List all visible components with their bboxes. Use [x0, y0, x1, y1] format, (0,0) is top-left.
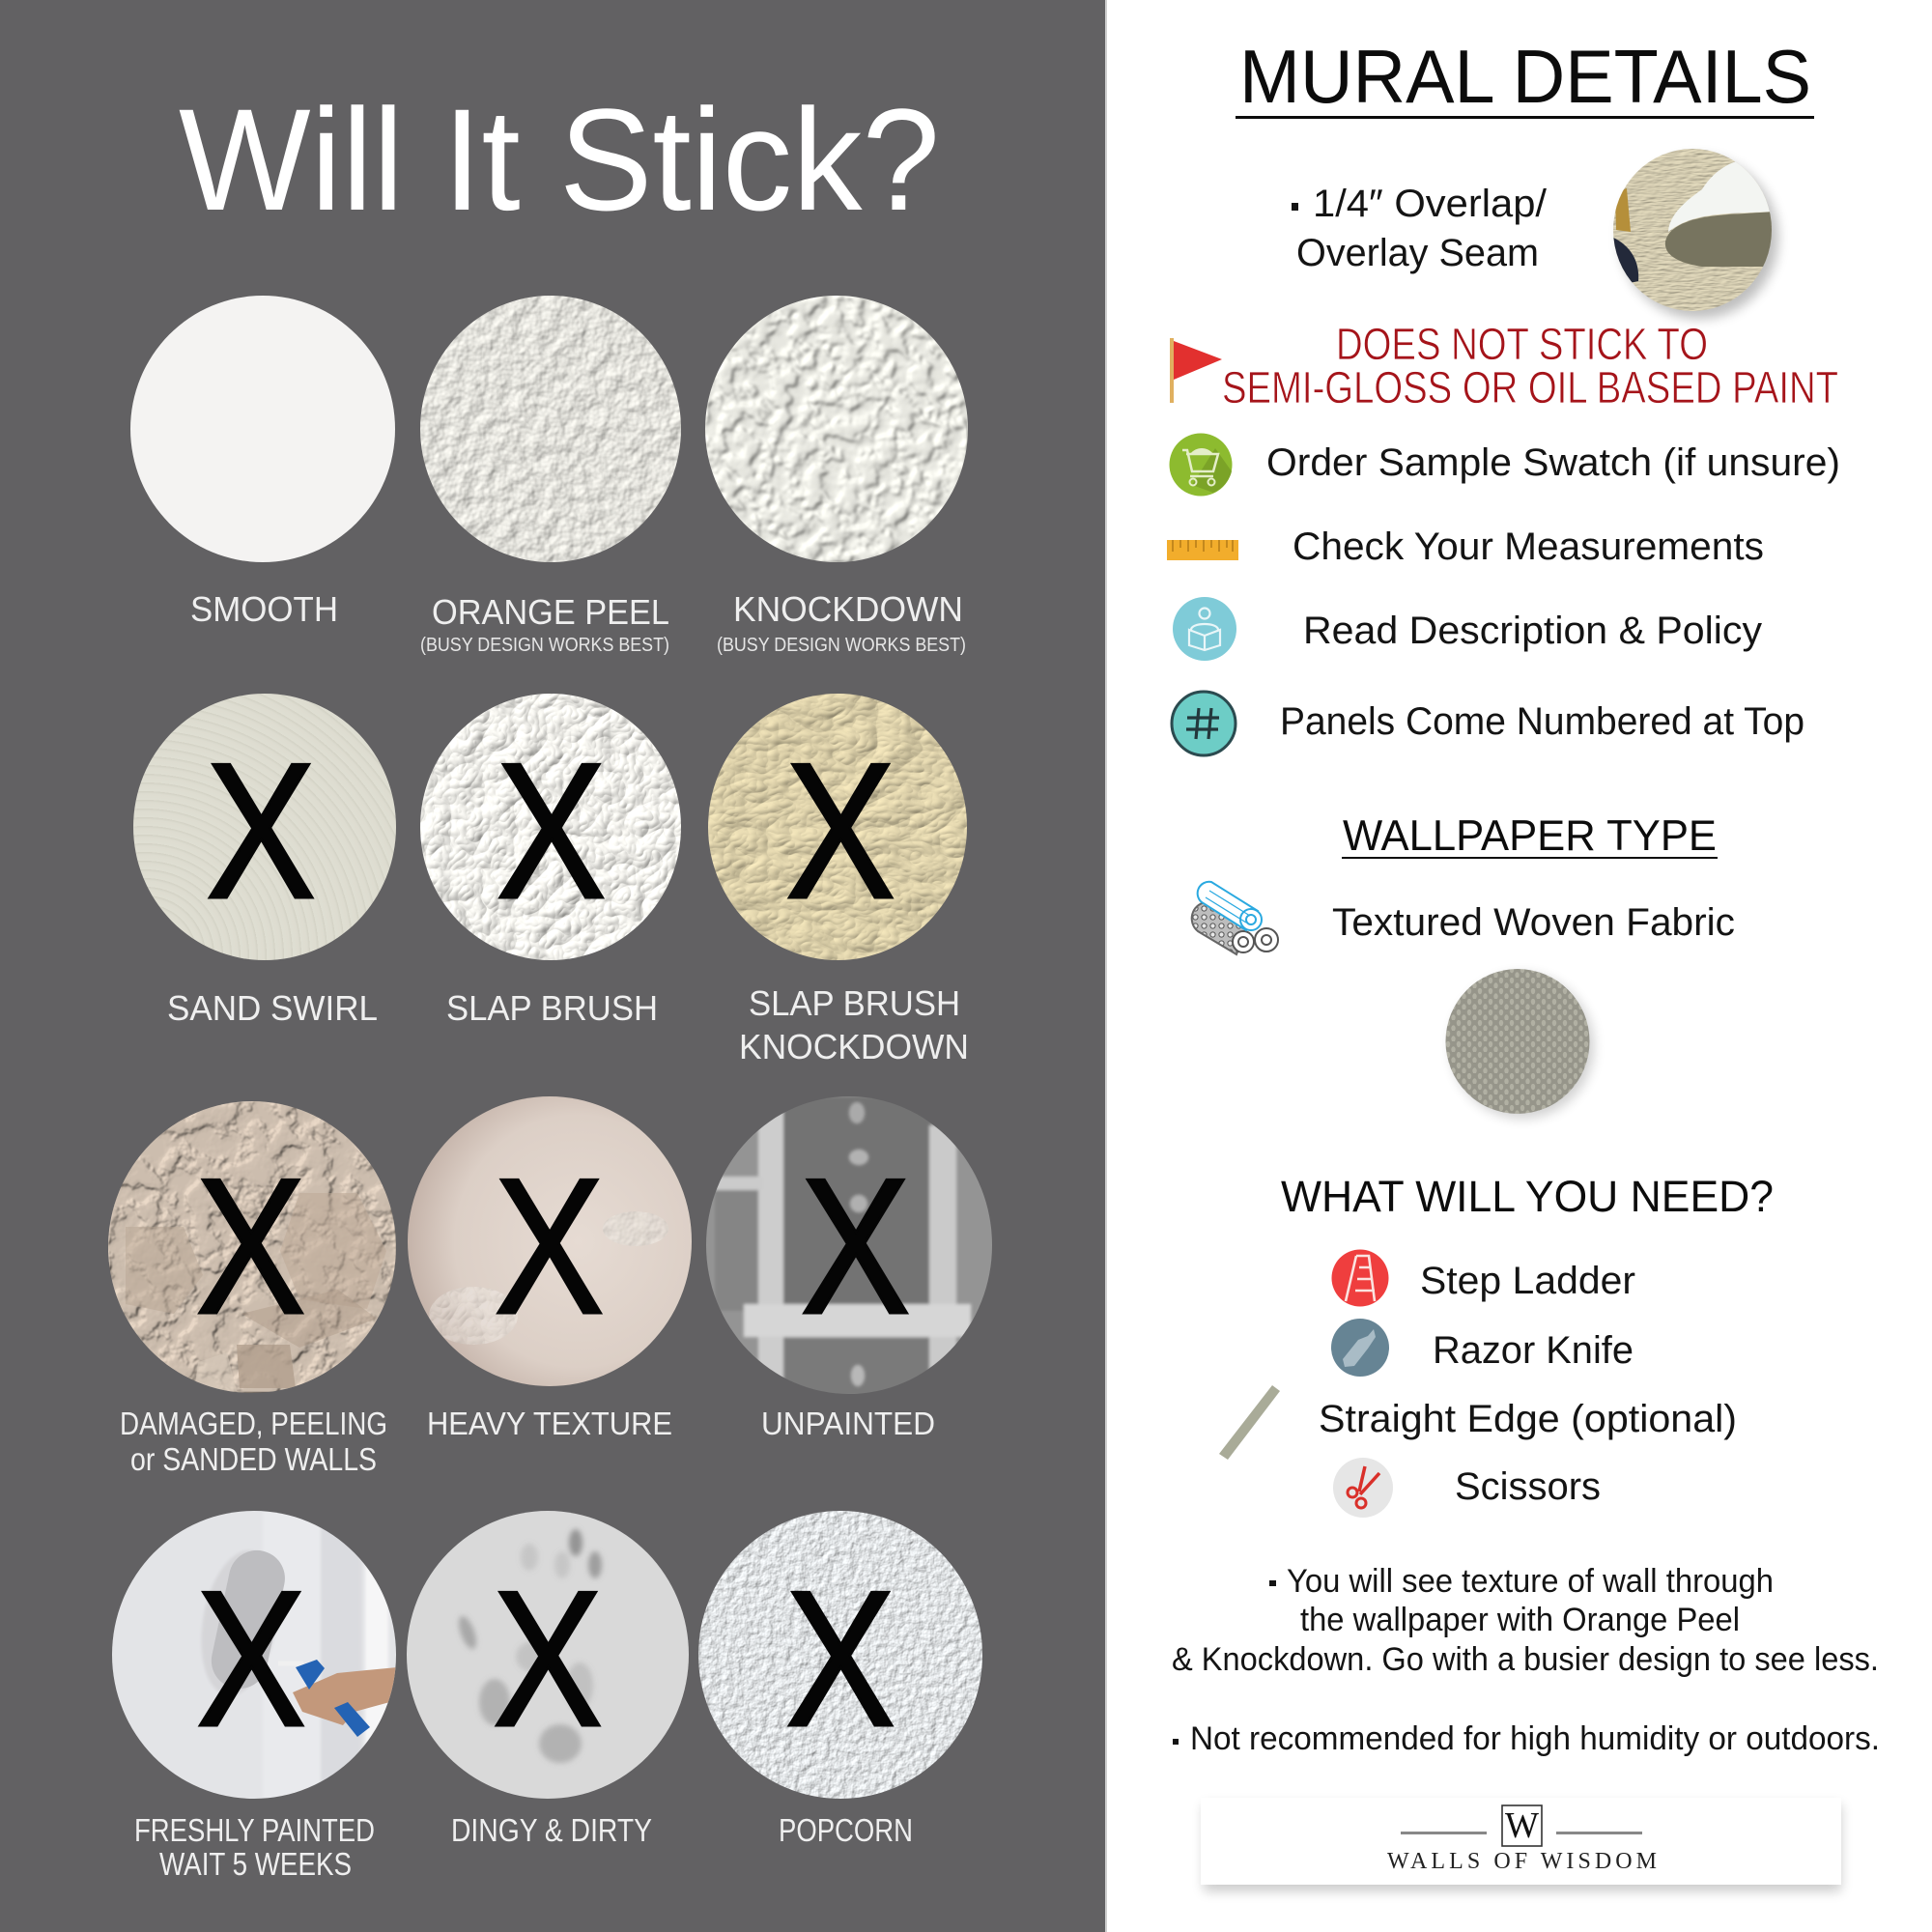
- label: damaged walls: DAMAGED, PEELING: [120, 1406, 387, 1441]
- text: step ladder: Step Ladder: [1420, 1260, 1635, 1302]
- note: texture through wallpaper: & Knockdown. Go with a busier design to see less.: [1172, 1641, 1879, 1678]
- label: damaged walls: or SANDED WALLS: [130, 1441, 377, 1477]
- icon: reader: [1173, 597, 1236, 661]
- heading: what will you need: WHAT WILL YOU NEED?: [1281, 1172, 1774, 1221]
- label: popcorn: POPCORN: [779, 1812, 913, 1848]
- label: freshly painted: [134, 1812, 375, 1882]
- swatch: slap brush knockdown: [708, 694, 969, 1066]
- text: check measurements: Check Your Measurements: [1293, 526, 1764, 568]
- icon: ruler: [1167, 540, 1238, 560]
- label: slap brush knockdown: [739, 983, 969, 1066]
- photo: overlap seam: [1609, 149, 1778, 319]
- text: order sample: Order Sample Swatch (if unsure): [1266, 441, 1840, 484]
- icon: straight edge: [1219, 1385, 1280, 1460]
- logo: walls of wisdom: [1201, 1798, 1841, 1891]
- label: freshly painted: FRESHLY PAINTED: [134, 1812, 375, 1848]
- swatch: woven fabric: [1445, 969, 1594, 1119]
- swatch: heavy texture: [408, 1096, 692, 1441]
- icon: razor knife: [1331, 1319, 1389, 1377]
- swatch: unpainted: [700, 1092, 1000, 1441]
- X mark: X: [801, 1139, 910, 1354]
- swatch: smooth: [130, 296, 395, 629]
- icon: sample cart: [1169, 433, 1233, 497]
- note: texture through wallpaper: [1172, 1563, 1879, 1678]
- warning: does not stick: DOES NOT STICK TO: [1336, 319, 1708, 369]
- icon: hash: [1172, 692, 1236, 755]
- logo: walls of wisdom: WALLS OF WISDOM: [1387, 1849, 1657, 1874]
- label: orange peel: ORANGE PEEL: [432, 592, 669, 632]
- swatch: knockdown: [705, 296, 968, 656]
- heading: wallpaper type: WALLPAPER TYPE: [1343, 812, 1717, 860]
- icon: red flag: [1170, 338, 1222, 403]
- panel: mural details: [1105, 0, 1932, 1932]
- X mark: X: [196, 1139, 305, 1354]
- note: busy design: (BUSY DESIGN WORKS BEST): [717, 635, 966, 656]
- X mark: X: [495, 1139, 604, 1354]
- text: panels numbered: Panels Come Numbered at Top: [1280, 700, 1804, 743]
- swatch: damaged walls: [108, 1101, 396, 1477]
- icon: wallpaper rolls: [1192, 882, 1278, 954]
- X mark: X: [785, 1551, 895, 1767]
- logo: walls of wisdom: W: [1505, 1805, 1539, 1846]
- X mark: X: [785, 724, 895, 939]
- X mark: X: [493, 1551, 603, 1767]
- peeling patches: [126, 1193, 386, 1401]
- swatch: sand swirl: [133, 694, 396, 1028]
- swatch: freshly painted: [106, 1507, 401, 1882]
- text: overlap seam: Overlay Seam: [1296, 232, 1539, 274]
- text: overlap seam: [1292, 183, 1548, 274]
- text: straight edge: Straight Edge (optional): [1319, 1398, 1737, 1440]
- label: sand swirl: SAND SWIRL: [167, 988, 378, 1028]
- label: unpainted: UNPAINTED: [761, 1406, 935, 1441]
- swatch: slap brush: [420, 694, 681, 1028]
- warning: does not stick: [1170, 319, 1838, 412]
- text: read description: Read Description & Policy: [1303, 610, 1762, 652]
- label: smooth: SMOOTH: [190, 589, 338, 629]
- icon: step ladder: [1331, 1250, 1389, 1306]
- note: texture through wallpaper: the wallpaper with Orange Peel: [1300, 1602, 1740, 1638]
- panel: will it stick: [0, 0, 1105, 1932]
- label: slap brush: SLAP BRUSH: [446, 988, 658, 1028]
- X mark: X: [497, 724, 606, 939]
- text: razor knife: Razor Knife: [1433, 1329, 1634, 1372]
- note: texture through wallpaper: You will see texture of wall through: [1287, 1563, 1774, 1600]
- label: dingy and dirty: DINGY & DIRTY: [451, 1812, 652, 1848]
- X mark: X: [196, 1551, 306, 1767]
- label: damaged walls: [120, 1406, 387, 1477]
- X mark: X: [206, 724, 316, 939]
- swatch: orange peel: [420, 296, 681, 656]
- text: textured woven fabric: Textured Woven Fabric: [1332, 901, 1735, 944]
- text: overlap seam: 1/4″ Overlap/: [1313, 183, 1548, 225]
- text: scissors: Scissors: [1455, 1465, 1601, 1508]
- title: Will It Stick?: [179, 78, 940, 241]
- label: slap brush knockdown: KNOCKDOWN: [739, 1027, 969, 1066]
- label: freshly painted: WAIT 5 WEEKS: [159, 1846, 352, 1882]
- swatch: dingy and dirty: [407, 1511, 689, 1848]
- icon: scissors: [1333, 1458, 1393, 1518]
- note: humidity: Not recommended for high humidity or outdoors.: [1190, 1720, 1880, 1757]
- label: knockdown: KNOCKDOWN: [733, 589, 963, 629]
- heading: mural details: MURAL DETAILS: [1239, 34, 1811, 119]
- swatch: popcorn: [698, 1511, 982, 1848]
- label: heavy texture: HEAVY TEXTURE: [427, 1406, 672, 1441]
- note: busy design: (BUSY DESIGN WORKS BEST): [420, 635, 669, 656]
- label: slap brush knockdown: SLAP BRUSH: [749, 983, 960, 1023]
